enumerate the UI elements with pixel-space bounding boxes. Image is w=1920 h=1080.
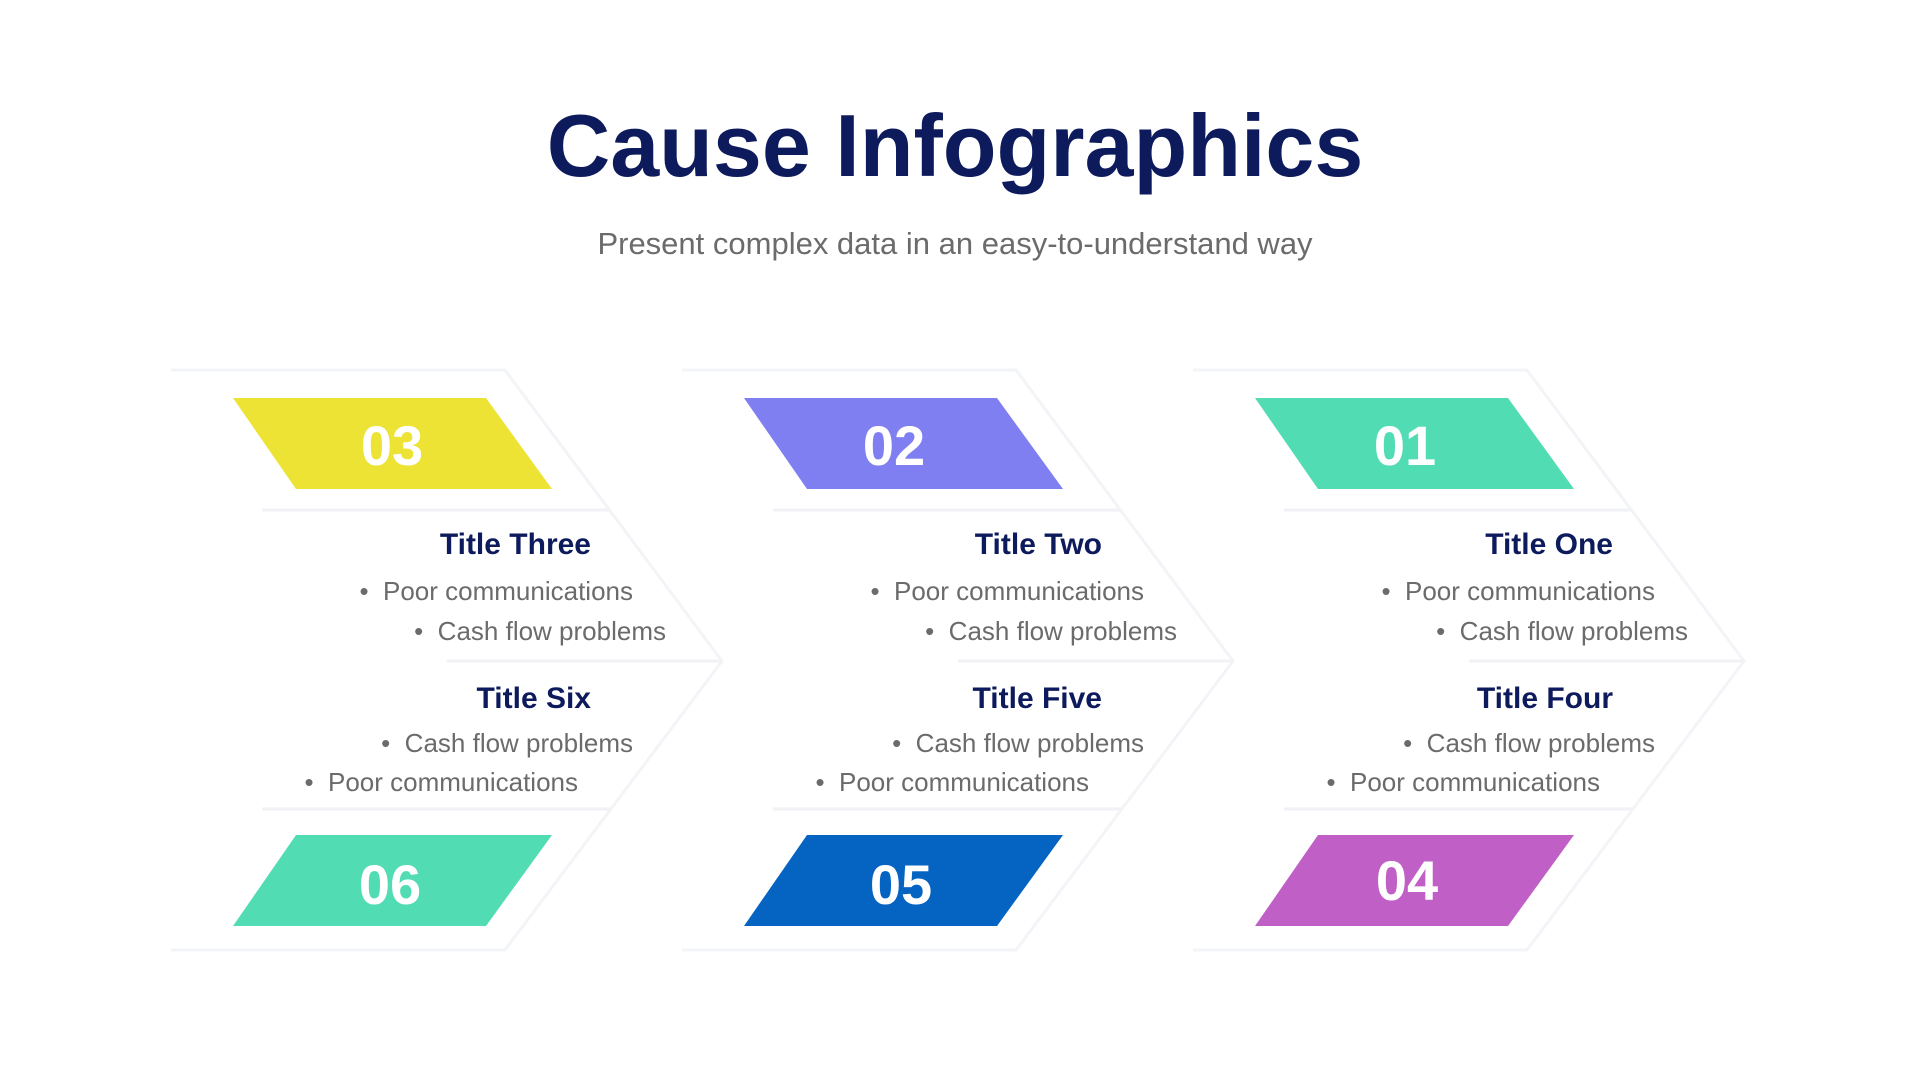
badge 02: 02 <box>863 414 925 477</box>
text: Title Four: Title Four <box>1477 682 1613 715</box>
badge 02 <box>744 398 1063 489</box>
text: Title One <box>1381 528 1688 646</box>
panel: column 1 (03 / 06) <box>171 370 722 950</box>
badge 05: 05 <box>870 853 932 916</box>
badge 03 <box>233 398 552 489</box>
text: Title One: • Poor communications <box>1381 576 1655 606</box>
badge 04: 04 <box>1376 849 1438 912</box>
text: Title Six: • Cash flow problems <box>381 728 633 758</box>
text: Title Two <box>870 528 1177 646</box>
text: Title Four: • Cash flow problems <box>1403 728 1655 758</box>
text: Title Four <box>1326 682 1655 797</box>
badge 01: 01 <box>1374 414 1436 477</box>
badge 06: 06 <box>359 853 421 916</box>
text: Title Three: Title Three <box>440 528 591 561</box>
text: Title Five: Title Five <box>972 682 1102 715</box>
badge 06 <box>233 835 552 926</box>
text: Title Three: • Cash flow problems <box>414 616 666 646</box>
text: Title Five: • Poor communications <box>815 767 1089 797</box>
badge 04 <box>1255 835 1574 926</box>
text: Title One: Title One <box>1485 528 1613 561</box>
text: Title Three <box>359 528 666 646</box>
text: Title Two: • Cash flow problems <box>925 616 1177 646</box>
title: Cause Infographics <box>547 96 1363 195</box>
text: Title Four: • Poor communications <box>1326 767 1600 797</box>
badge 01 <box>1255 398 1574 489</box>
text: Title Five: • Cash flow problems <box>892 728 1144 758</box>
text: Title Six: Title Six <box>476 682 591 715</box>
text: Title Six <box>304 682 633 797</box>
text: Title Three: • Poor communications <box>359 576 633 606</box>
panel: column 2 (02 / 05) <box>682 370 1233 950</box>
panel: column 3 (01 / 04) <box>1193 370 1744 950</box>
subtitle: Present complex data in an easy-to-understand way <box>597 226 1313 261</box>
badge 05 <box>744 835 1063 926</box>
text: Title Two: Title Two <box>975 528 1102 561</box>
text: Title One: • Cash flow problems <box>1436 616 1688 646</box>
text: Title Six: • Poor communications <box>304 767 578 797</box>
text: Title Five <box>815 682 1144 797</box>
text: Title Two: • Poor communications <box>870 576 1144 606</box>
badge 03: 03 <box>361 414 423 477</box>
